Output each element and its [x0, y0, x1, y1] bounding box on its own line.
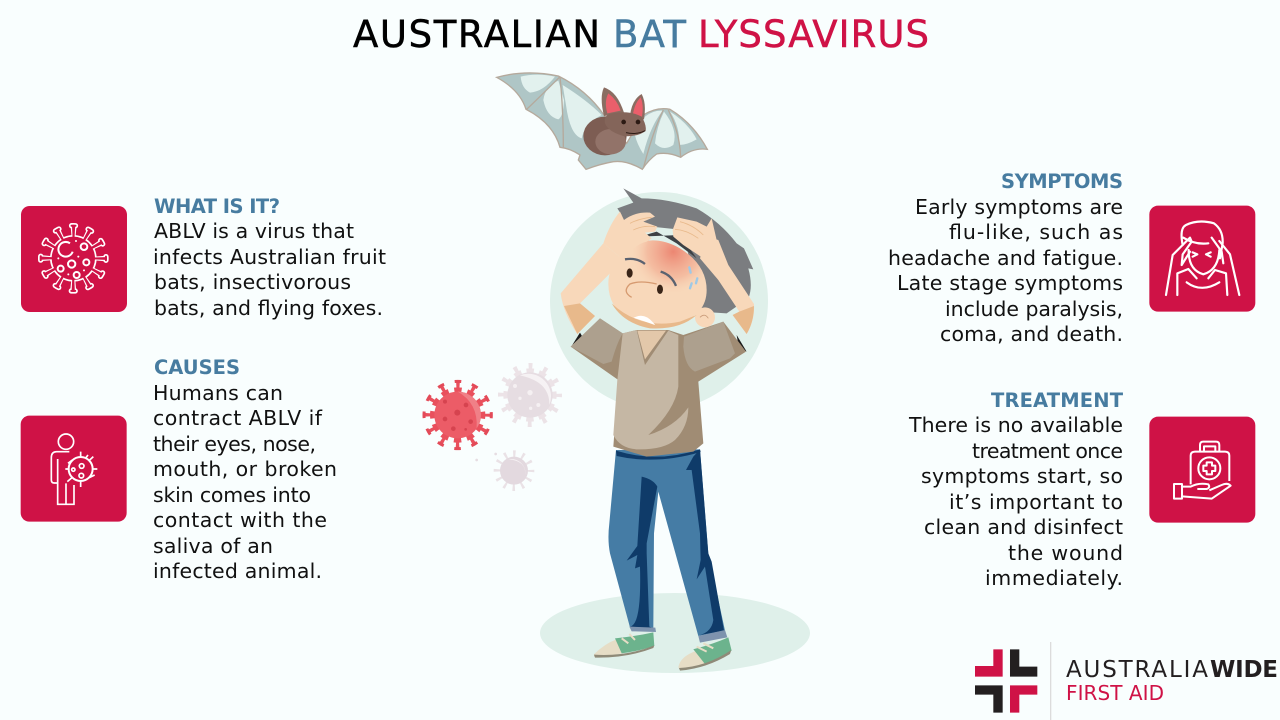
- text block: symptoms: [888, 195, 1123, 346]
- icon: virus: [21, 206, 127, 312]
- head: [603, 188, 754, 334]
- title: LYSSAVIRUS: [698, 13, 929, 56]
- illustration: person with headache: [561, 188, 754, 671]
- text block: causes: [153, 381, 337, 583]
- illustration: bat: [497, 73, 707, 169]
- text block: causes: saliva of an: [153, 534, 273, 558]
- logo text: AUSTRALIA: [1066, 657, 1208, 683]
- panel: what is it: [21, 195, 386, 320]
- text block: treatment: immediately.: [985, 566, 1123, 590]
- icon: person with virus: [21, 416, 127, 522]
- heading: causes: CAUSES: [154, 356, 240, 379]
- bat body: [583, 87, 646, 155]
- heading: what is it: WHAT IS IT?: [154, 195, 280, 218]
- arms: [561, 243, 747, 352]
- illustration: virus particles: [424, 367, 558, 487]
- text block: symptoms: Late stage symptoms: [897, 271, 1123, 295]
- logo text: WIDE: [1210, 657, 1278, 683]
- text block: what is it: ABLV is a virus that: [154, 219, 354, 243]
- icon: headache: [1149, 206, 1255, 312]
- text block: treatment: the wound: [1008, 541, 1123, 565]
- text block: symptoms: headache and fatigue.: [888, 246, 1123, 270]
- text block: what is it: bats, and flying foxes.: [154, 296, 383, 320]
- heading: symptoms: SYMPTOMS: [1001, 170, 1123, 193]
- logo: Australia Wide First Aid: [975, 642, 1278, 720]
- text block: treatment: clean and disinfect: [924, 515, 1123, 539]
- pale virus large: [502, 367, 558, 423]
- text block: treatment: it’s important to: [949, 490, 1123, 514]
- title: AUSTRALIAN: [353, 13, 600, 56]
- text block: symptoms: coma, and death.: [940, 322, 1123, 346]
- title: BAT: [613, 13, 686, 56]
- text block: causes: Humans can: [153, 381, 283, 405]
- logo mark: [975, 642, 1051, 720]
- panel: causes: [21, 356, 337, 583]
- text block: symptoms: Early symptoms are: [915, 195, 1123, 219]
- legs: [594, 449, 732, 671]
- text block: causes: skin comes into: [153, 483, 311, 507]
- panel: symptoms: [888, 170, 1255, 346]
- shirt: [571, 318, 746, 457]
- logo text: FIRST AID: [1066, 681, 1164, 705]
- right arm and hands: [603, 212, 754, 334]
- text block: treatment: [908, 413, 1123, 590]
- text block: what is it: [153, 219, 386, 320]
- pale virus small: [475, 453, 531, 487]
- panel: treatment: [908, 389, 1255, 590]
- text block: causes: contact with the: [153, 508, 327, 532]
- text block: causes: contract ABLV if: [153, 406, 323, 430]
- red virus: [424, 381, 491, 449]
- text block: what is it: bats, insectivorous: [154, 270, 351, 294]
- text block: symptoms: flu-like, such as: [949, 220, 1123, 244]
- green circle behind head: [550, 192, 768, 410]
- text block: treatment: symptoms start, so: [921, 464, 1123, 488]
- heading: treatment: TREATMENT: [991, 389, 1124, 412]
- icon: first aid kit in hand: [1149, 417, 1255, 523]
- text block: what is it: infects Australian fruit: [153, 245, 386, 269]
- logo text: [1066, 657, 1278, 705]
- text block: treatment: treatment once: [972, 439, 1123, 463]
- text block: causes: their eyes, nose,: [153, 432, 316, 456]
- text block: causes: mouth, or broken: [153, 457, 337, 481]
- text block: symptoms: include paralysis,: [945, 297, 1123, 321]
- ground ellipse: [540, 593, 810, 673]
- text block: causes: infected animal.: [153, 559, 322, 583]
- shoes: [594, 632, 732, 671]
- title: [353, 13, 929, 56]
- text block: treatment: There is no available: [908, 413, 1123, 437]
